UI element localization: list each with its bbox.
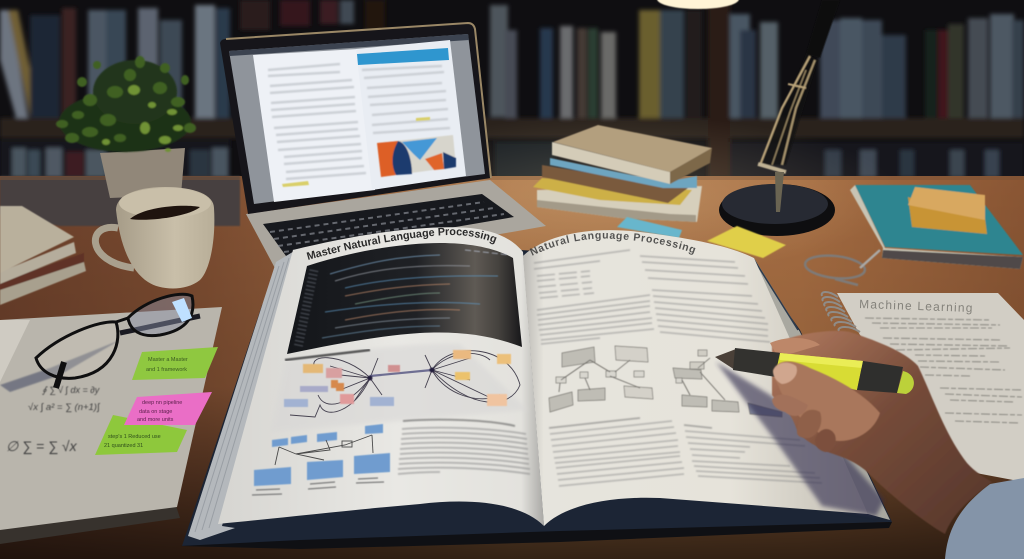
index fingertip [770, 338, 820, 354]
pen tip [715, 349, 736, 370]
diagram hub links [290, 351, 520, 417]
eyeglasses [36, 294, 200, 388]
background: bookshelf [0, 0, 1024, 180]
right notebook [822, 292, 1024, 482]
glasses shadow [0, 340, 120, 392]
keyboard [263, 194, 514, 256]
document page right [356, 40, 466, 190]
left page title: Master Natural Language Processing [306, 228, 497, 260]
code lines [298, 250, 510, 348]
leaves [56, 56, 196, 152]
diagram heading [285, 350, 370, 360]
network diagram [270, 344, 528, 432]
highlighter shadow on page [716, 362, 884, 516]
coffee mug [95, 187, 214, 288]
yellow highlights [282, 117, 430, 187]
right page upper text [534, 250, 770, 344]
diagram background [270, 344, 528, 432]
lamp shade light [657, 0, 739, 9]
sticky note pink: data on stage [139, 409, 172, 415]
book cover [182, 250, 892, 546]
formulas: √x ∫ a² = ∑ (n+1)∫ [28, 402, 101, 413]
laptop [220, 23, 546, 272]
sticky note green top [132, 347, 218, 380]
sticky note green bottom: 21 quantized 31 [104, 443, 143, 449]
sticky notes on desk [617, 217, 786, 258]
notebook left with notes [0, 294, 222, 544]
sticky note green bottom [95, 415, 187, 455]
stack of books [533, 125, 712, 222]
open book [182, 227, 892, 549]
thumb and fingers [772, 361, 880, 452]
flow diagram blue boxes [252, 424, 390, 495]
laptop base [246, 180, 546, 272]
reading glasses on desk [804, 250, 880, 285]
left page stack [188, 250, 296, 540]
sleeve [945, 478, 1024, 559]
hand holding highlighter [715, 331, 1024, 559]
desk surface [0, 176, 1024, 559]
highlighter [715, 348, 914, 394]
pen cap [857, 361, 903, 393]
right page title: Natural Language Processing [530, 233, 696, 256]
lamp [657, 0, 840, 236]
document chart [377, 135, 456, 177]
laptop screen [229, 34, 485, 204]
teal book with sticky pads [850, 185, 1023, 269]
document page left [253, 49, 375, 202]
spiral binding [822, 292, 860, 332]
formulas: ∅ ∑ = ∑ √x [6, 438, 78, 455]
sticky note pink [124, 392, 212, 425]
pen yellow body [775, 353, 863, 390]
laptop lid [220, 23, 491, 214]
left page text column [398, 420, 530, 474]
notebook cover edge [0, 506, 180, 544]
flow box captions [252, 478, 384, 495]
lamp arm [758, 0, 840, 172]
plant [56, 56, 196, 198]
handwritten heading: Machine Learning [859, 297, 974, 315]
handwritten lines [865, 318, 1022, 423]
diagram nodes [284, 350, 511, 407]
sticky note green bottom: step's 1 Reduced use [108, 434, 161, 440]
pot [100, 148, 185, 198]
sticky note pink: deep nn pipeline [142, 400, 182, 406]
hand back [772, 331, 992, 534]
document text lines [268, 64, 450, 179]
left page [218, 227, 544, 526]
notebook pages [0, 307, 222, 530]
lamp base [719, 184, 835, 236]
right page stack [738, 254, 890, 520]
lamp glow [340, 115, 900, 275]
pen barrel [733, 348, 782, 377]
right page flow diagrams [549, 346, 782, 417]
sticky note green top: Master a Master [148, 357, 188, 363]
formulas [6, 385, 101, 455]
formulas: ∮ ∑ √ ∫ dx = ∂y [42, 385, 100, 395]
sticky note pink: and more units [137, 417, 174, 423]
stacked books left [0, 206, 86, 305]
notebook page [837, 293, 1024, 482]
right page lower text [549, 418, 822, 486]
sticky note green top: and 1 framework [146, 367, 187, 373]
right page [523, 230, 868, 526]
code screenshot [287, 243, 522, 354]
blue banner [357, 48, 449, 65]
